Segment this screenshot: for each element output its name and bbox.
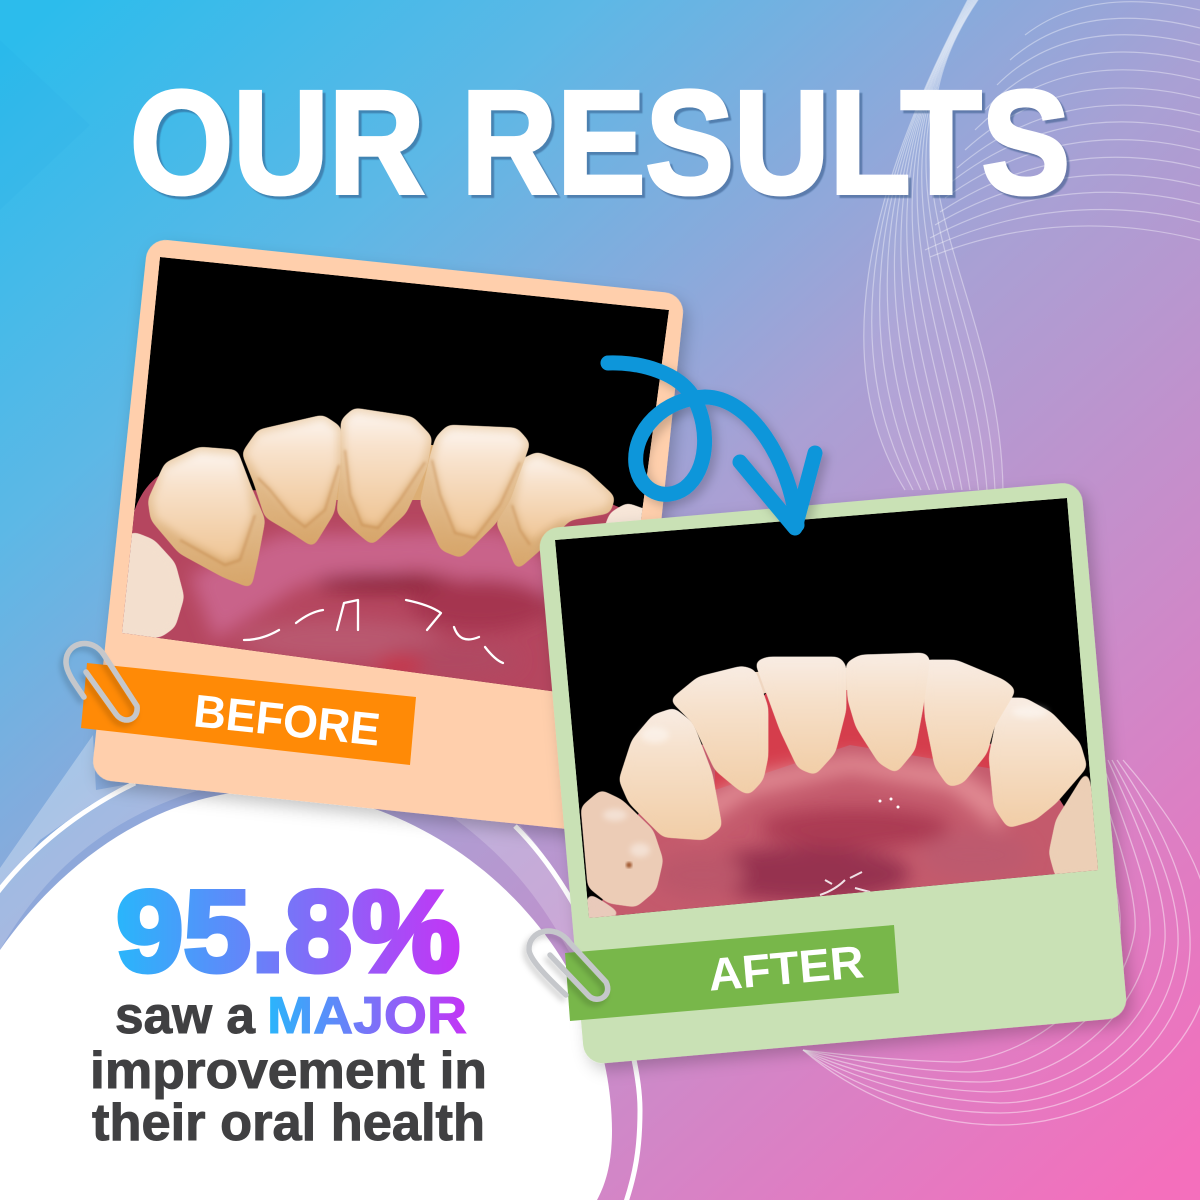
- photo: stained teeth: [100, 257, 669, 720]
- white ring outline: [0, 783, 640, 1200]
- label text: after: AFTER: [706, 935, 866, 1001]
- polaroid card: after: [529, 482, 1128, 1065]
- statistic line 2: improvement in: [90, 1042, 487, 1100]
- emphasized word MAJOR: MAJOR: [267, 987, 467, 1045]
- label tag: after: [565, 925, 899, 1021]
- icon: paper clip before: [66, 643, 137, 720]
- statistic line 1: saw a: [115, 987, 256, 1045]
- statistic text block: [90, 868, 487, 1152]
- statistic number: 95.8%: [116, 868, 460, 996]
- icon: paper clip after: [529, 931, 608, 999]
- card frame: before: [91, 238, 685, 835]
- arrow: before to after: [608, 363, 815, 528]
- photo: clean teeth: [555, 498, 1110, 930]
- decorative wave ribbon: bottom right: [803, 760, 1200, 1125]
- card frame: after: [538, 482, 1128, 1065]
- label tag: before: [81, 663, 416, 765]
- decorative wave ribbon: top right: [0, 0, 1200, 490]
- decorative wave ribbon: lower left: [0, 735, 595, 990]
- label text: before: BEFORE: [191, 684, 383, 756]
- title: OUR RESULTS: [130, 61, 1070, 225]
- white circle panel: [0, 790, 612, 1200]
- polaroid card: before: [66, 238, 685, 835]
- statistic line 3: their oral health: [92, 1094, 485, 1152]
